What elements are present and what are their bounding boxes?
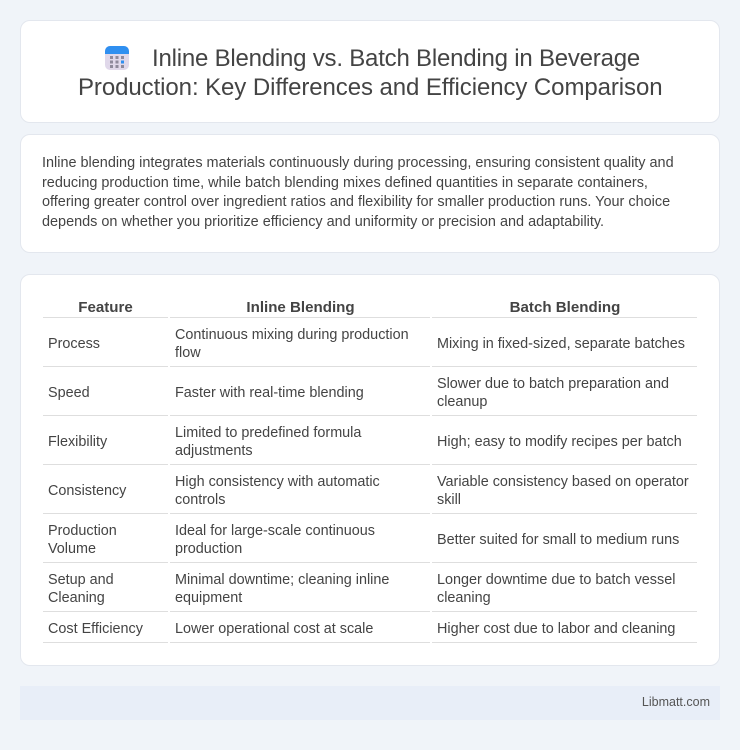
title [78, 45, 663, 101]
row: Production Volume: production [175, 541, 242, 557]
footer text: Libmatt.com [642, 695, 710, 709]
intro text: depends on whether you prioritize efficiency and uniformity or precision and adaptability. [42, 214, 604, 230]
row: Process: flow [175, 345, 201, 361]
title: Production: Key Differences and Efficiency Comparison [78, 74, 663, 101]
row: Flexibility: Limited to predefined formula [175, 425, 361, 441]
row: Speed: Speed [48, 385, 90, 401]
row: Cost Efficiency: Cost Efficiency [48, 621, 143, 637]
row: Process: Process [48, 336, 100, 352]
row: Production Volume: Production [48, 523, 117, 539]
table card [20, 274, 720, 666]
row: Setup and Cleaning: equipment [175, 590, 242, 606]
row: Speed [48, 376, 669, 410]
row: Production Volume: Ideal for large-scale continuous [175, 523, 375, 539]
row: Flexibility: adjustments [175, 443, 253, 459]
header: Batch Blending: Batch Blending [510, 299, 620, 316]
row: Setup and Cleaning [48, 572, 675, 606]
row: Production Volume [48, 523, 679, 557]
row: Consistency: controls [175, 492, 225, 508]
title: Inline Blending vs. Batch Blending in Beverage [152, 45, 640, 72]
row: Setup and Cleaning: cleaning [437, 590, 491, 606]
header: Inline Blending: Inline Blending [246, 299, 355, 316]
row: Speed: Faster with real-time blending [175, 385, 364, 401]
row: Flexibility: Flexibility [48, 434, 107, 450]
header card [20, 20, 720, 123]
intro card [20, 134, 720, 253]
row: Process: Continuous mixing during production [175, 327, 409, 343]
row: Consistency [48, 474, 689, 508]
row: Process: Mixing in fixed-sized, separate batches [437, 336, 685, 352]
row: Production Volume: Volume [48, 541, 96, 557]
icon: calendar grid [105, 46, 129, 70]
row: Consistency: Variable consistency based on operator [437, 474, 689, 490]
row: Flexibility [48, 425, 682, 459]
row: Flexibility: High; easy to modify recipes per batch [437, 434, 682, 450]
row: Speed: cleanup [437, 394, 487, 410]
row: Consistency: skill [437, 492, 461, 508]
row: Consistency: Consistency [48, 483, 126, 499]
row: Setup and Cleaning: Cleaning [48, 590, 105, 606]
table [43, 299, 697, 643]
row: Cost Efficiency: Lower operational cost at scale [175, 621, 373, 637]
row: Setup and Cleaning: Setup and [48, 572, 114, 588]
row: Consistency: High consistency with automatic [175, 474, 380, 490]
row: Speed: Slower due to batch preparation and [437, 376, 669, 392]
row: Production Volume: Better suited for small to medium runs [437, 532, 679, 548]
intro text [42, 155, 674, 230]
intro text: offering greater control over ingredient ratios and flexibility for smaller production runs. Your choice [42, 194, 670, 210]
row: Cost Efficiency: Higher cost due to labor and cleaning [437, 621, 675, 637]
row: Setup and Cleaning: Longer downtime due to batch vessel [437, 572, 675, 588]
footer bar [20, 686, 720, 720]
intro text: Inline blending integrates materials continuously during processing, ensuring consistent quality and [42, 155, 674, 171]
intro text: reducing production time, while batch blending mixes defined quantities in separate containers, [42, 174, 648, 190]
row: Cost Efficiency [48, 621, 675, 637]
row: Process [48, 327, 685, 361]
header: Feature: Feature [78, 299, 133, 316]
row: Setup and Cleaning: Minimal downtime; cleaning inline [175, 572, 389, 588]
